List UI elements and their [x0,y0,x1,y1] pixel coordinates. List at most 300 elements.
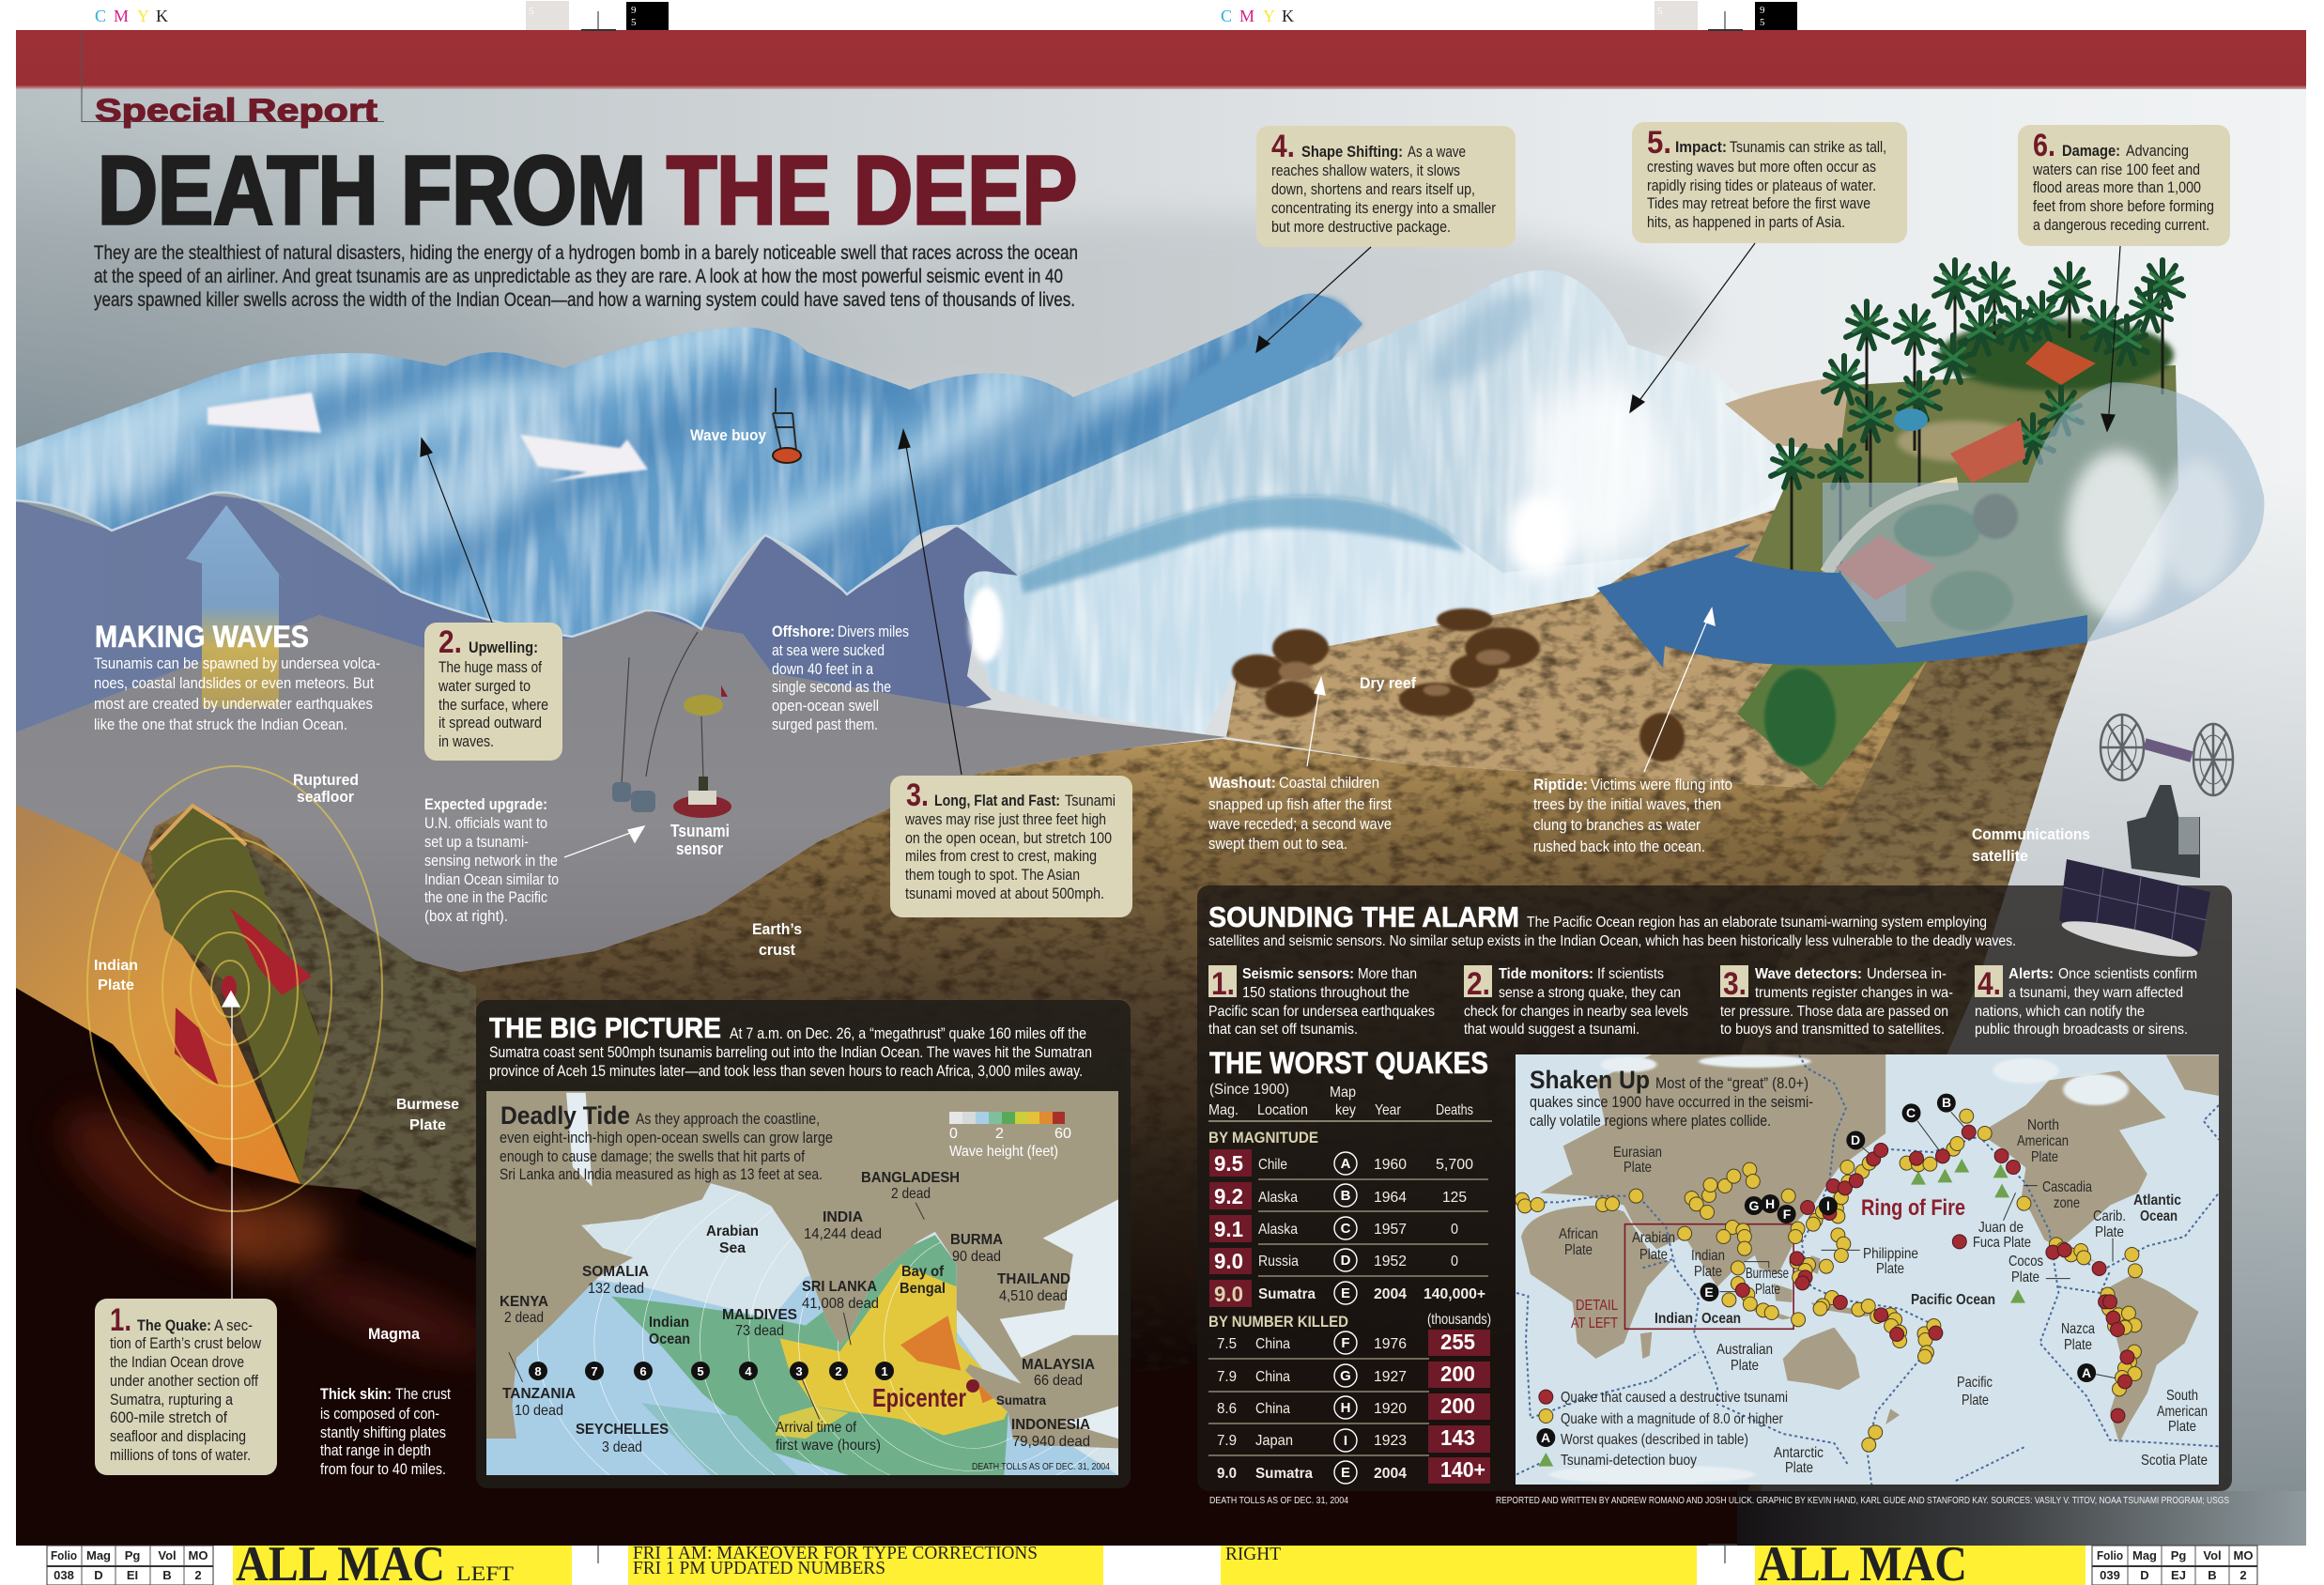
Special Report heading: Special Report [95,93,377,129]
folio table right: D [2140,1568,2149,1582]
callout 4: shape shifting: concentrating its energy into a smaller [1271,199,1496,217]
offshore note: Divers miles [838,623,909,640]
thick skin note: Thick skin: [320,1386,392,1403]
table: the worst quakes: A [1341,1156,1351,1172]
shaken up heading [1530,1066,1813,1130]
expected upgrade note: U.N. officials want to [424,814,547,832]
table: the worst quakes: 9.5 [1214,1151,1243,1176]
offshore note: single second as the [772,678,891,696]
table: the worst quakes: E [1341,1465,1350,1481]
callout 3: long, flat and fast: Long, Flat and Fast: [934,792,1060,809]
expected upgrade note [424,795,559,925]
offshore note: at sea were sucked [772,641,885,659]
blue second wave crest [1164,297,1362,441]
country death tolls: Ocean [649,1331,690,1347]
intro paragraph [94,242,1078,311]
folio table left: 2 [194,1568,202,1582]
quake shock rings [87,766,382,1211]
callout 6: damage: waters can rise 100 feet and [2032,161,2200,178]
folio table left: Folio [51,1548,77,1562]
tectonic plate labels: Eurasian [1613,1145,1662,1161]
table: the worst quakes: 9.2 [1214,1184,1243,1208]
CMYK marks left: M [114,7,129,25]
item: wave detectors [1720,965,1953,1038]
crop marks and registration [526,1,1797,1563]
callout 4: shape shifting: 4. [1271,129,1295,164]
item: alerts: a tsunami, they warn affected [2008,985,2183,1001]
callout 3: long, flat and fast: tsunami moved at about 500mph. [905,885,1104,902]
country death tolls: MALDIVES [722,1307,797,1323]
item: wave detectors: to buoys and transmitted to satellites. [1720,1022,1945,1038]
world map: shaken up: B [1942,1095,1951,1110]
shaken up heading: Most of the “great” (8.0+) [1655,1074,1808,1092]
tectonic plate labels: Carib. [2093,1208,2126,1224]
item: alerts: Once scientists confirm [2058,966,2197,982]
callout 6: damage: Damage: [2062,142,2120,160]
table: the worst quakes: 1957 [1374,1222,1407,1238]
washout note: Coastal children [1279,774,1379,792]
map: deadly tide [486,1091,1118,1475]
crop marks and registration: 5 [1657,6,1663,17]
tectonic plate labels: Plate [1731,1358,1759,1374]
intro paragraph: at the speed of an airliner. And great tsunamis are as unpredictable as they are rare. A look at how the most powerful seismic event in 40 [94,266,1063,287]
wave buoy label: Wave buoy [690,426,766,444]
folio table right: Mag [2132,1548,2157,1562]
deadly tide heading: Sri Lanka and India measured as high as 13 feet at sea. [500,1166,823,1183]
country death tolls: 3 dead [602,1439,642,1455]
CMYK marks right: M [1239,7,1254,25]
country death tolls: BANGLADESH [861,1170,960,1186]
offshore note: Offshore: [772,623,835,640]
callout 6: damage: flood areas more than 1,000 [2033,178,2201,196]
riptide note [1533,776,1732,855]
tectonic plate labels: Plate [1876,1261,1904,1277]
item: wave detectors: 3. [1723,966,1747,1002]
yellow slug: all mac left: LEFT [456,1562,515,1585]
item: alerts: nations, which can notify the [1975,1004,2145,1020]
satellite drum [2059,859,2210,963]
callout 6: damage [2018,125,2230,246]
tectonic plate labels: Ocean [1701,1311,1741,1327]
tectonic plate labels: American [2157,1404,2208,1420]
callout 5: impact: cresting waves but more often occur as [1647,158,1876,176]
table: the worst quakes: Sumatra [1255,1466,1313,1482]
tectonic plate labels: South [2166,1388,2198,1404]
receding water disc [1823,382,2264,657]
burmese plate label [396,1097,459,1133]
table: the worst quakes: 8.6 [1217,1401,1237,1417]
country death tolls: Arabian [706,1223,759,1239]
folio table left: Mag [86,1548,111,1562]
tectonic plate labels: Juan de [1978,1220,2024,1236]
country death tolls: 10 dead [515,1403,563,1419]
item: wave detectors: truments register changes in wa- [1755,985,1953,1001]
tectonic plate labels [1559,1117,2208,1476]
callout 2: upwelling: Upwelling: [469,639,538,656]
yellow slug: all mac right [1755,1537,2085,1585]
trees and village [1764,260,2183,766]
table: the worst quakes: 1952 [1374,1254,1407,1270]
world map: shaken up: I [1826,1198,1830,1213]
callout 1: the quake: Sumatra, rupturing a [110,1392,234,1408]
callout 5: impact: rapidly rising tides or plateaus of water. [1647,177,1876,194]
callout 2: upwelling: 2. [439,624,462,660]
folio table right: EJ [2171,1568,2186,1582]
expected upgrade note: sensing network in the [424,852,558,869]
tectonic plate labels: Australian [1716,1342,1773,1358]
table: the worst quakes: Map [1330,1085,1356,1100]
shaken up heading: quakes since 1900 have occurred in the seismi- [1530,1093,1813,1111]
making waves text block: MAKING WAVES [95,620,309,654]
country death tolls: THAILAND [997,1271,1070,1287]
callout 4: shape shifting: As a wave [1408,143,1466,161]
tectonic plate labels: Antarctic [1774,1445,1824,1461]
item: seismic sensors: that can set off tsunamis. [1208,1022,1358,1038]
callout 2: upwelling: the surface, where [439,696,548,714]
breaking tsunami wave [958,270,1784,662]
table: the worst quakes: Mag. [1208,1102,1239,1118]
country death tolls: 73 dead [735,1323,784,1339]
offshore note [772,623,909,733]
dry reef rocks [1232,608,1685,762]
tectonic plate labels: Ocean [2140,1208,2178,1224]
callout 2: upwelling: The huge mass of [439,658,542,676]
making waves text block: like the one that struck the Indian Ocean. [94,716,347,733]
folio table right: 2 [2239,1568,2247,1582]
intro paragraph: They are the stealthiest of natural disasters, hiding the energy of a hydrogen bomb in a barely noticeable swell that races across the ocean [94,242,1078,264]
country death tolls: Indian [649,1315,689,1331]
country death tolls: Bay of [901,1264,945,1280]
Indian plate wedge [16,805,300,1184]
big picture heading: At 7 a.m. on Dec. 26, a “megathrust” quake 160 miles off the [730,1025,1086,1042]
callout 4: shape shifting [1256,126,1516,247]
tectonic plate labels: Atlantic [2133,1193,2181,1208]
world map legend: Worst quakes (described in table) [1561,1432,1748,1448]
magma label: Magma [368,1325,421,1343]
country death tolls: 2 dead [891,1186,931,1202]
callout 2: upwelling: in waves. [439,732,494,750]
callout 1: the quake: the Indian Ocean drove [110,1354,244,1371]
callout 1: the quake: A sec- [214,1317,253,1334]
table: the worst quakes: 140+ [1440,1457,1485,1482]
water cross-section body [16,495,1019,732]
item: seismic sensors: More than [1358,966,1417,982]
tectonic plate labels: Plate [1785,1460,1813,1476]
epicenter marker: Epicenter [872,1383,966,1412]
riptide note: Riptide: [1533,776,1588,793]
wave height legend: Wave height (feet) [949,1144,1058,1160]
table: the worst quakes: 5,700 [1436,1157,1473,1173]
white direction arrows on the waves [208,392,648,482]
arrival time hour markers: 5 [697,1364,704,1378]
item: tide monitors: sense a strong quake, they can [1499,985,1681,1001]
indian plate label: Plate [98,977,134,993]
washout note: snapped up fish after the first [1208,795,1392,813]
wave buoy [773,388,801,463]
big picture heading: province of Aceh 15 minutes later—and took less than seven hours to reach Africa, 3,000 miles away. [489,1063,1083,1080]
tectonic plate labels: Indian [1655,1311,1693,1327]
olive fault wedge [150,806,321,1184]
world map legend: Tsunami-detection buoy [1561,1453,1697,1469]
item: alerts: Alerts: [2008,966,2054,982]
earth crust cross-section [16,642,2087,1546]
alarm heading: satellites and seismic sensors. No similar setup exists in the Indian Ocean, which has been historically less vulnerable to the deadly waves. [1208,933,2016,949]
ruptured seafloor label [293,771,359,806]
country death tolls: 14,244 dead [804,1226,882,1242]
world map: shaken up: A [1541,1430,1550,1445]
panel: the big picture [476,1000,1408,1584]
item: seismic sensors: Pacific scan for undersea earthquakes [1208,1004,1435,1020]
table: the worst quakes: 255 [1440,1330,1475,1354]
callout 4: shape shifting: but more destructive package. [1271,218,1451,236]
callout 3: long, flat and fast: waves may rise just three feet high [904,810,1106,828]
table: the worst quakes: 0 [1451,1222,1458,1238]
world map: shaken up: A [2082,1365,2091,1380]
title: THE DEEP [667,136,1077,244]
CMYK marks left: Y [137,7,149,25]
callout 4: shape shifting: reaches shallow waters, it slows [1271,162,1460,179]
earth's crust label [752,920,802,959]
table: the worst quakes: China [1255,1336,1290,1352]
coastal land [1734,365,2178,657]
callout 6: damage: Advancing [2126,142,2189,160]
arrival time hour markers: 6 [639,1364,647,1378]
item: tide monitors: 2. [1467,966,1490,1002]
callout 2: upwelling: it spread outward [439,714,542,731]
crop marks and registration: 9 [1760,5,1765,16]
plate motion red arrows [175,908,312,1085]
table: the worst quakes: THE WORST QUAKES [1209,1046,1488,1080]
offshore note: down 40 feet in a [772,660,873,678]
table: the worst quakes: 125 [1442,1190,1467,1206]
table: the worst quakes: 2004 [1374,1466,1407,1482]
callout 3: long, flat and fast: on the open ocean, but stretch 100 [905,829,1112,847]
washout note: Washout: [1208,774,1276,792]
table: the worst quakes: 200 [1440,1393,1475,1418]
table: the worst quakes: (Since 1900) [1209,1082,1289,1098]
arrival time hour markers: 1 [881,1364,888,1378]
table: the worst quakes: 9.1 [1214,1217,1243,1241]
table: the worst quakes: 7.5 [1217,1336,1237,1352]
big picture heading [489,1011,1092,1080]
callout 1: the quake: The Quake: [137,1317,211,1334]
table: the worst quakes: I [1344,1433,1347,1449]
tectonic plate labels: Plate [1624,1160,1652,1176]
table: the worst quakes: Location [1257,1102,1308,1118]
yellow slug: corrections note [628,1543,1103,1585]
making waves text block: most are created by underwater earthquakes [94,695,373,713]
tectonic plate labels: Plate [2095,1224,2124,1240]
callout 1: the quake: seafloor and displacing [110,1428,246,1445]
crop marks and registration: 9 [631,5,637,16]
tectonic plate labels: Plate [1564,1242,1593,1258]
expected upgrade note: set up a tsunami- [424,833,529,851]
folio table right: B [2208,1568,2217,1582]
world map: shaken up: F [1783,1207,1792,1222]
tectonic plate labels: Philippine [1863,1246,1918,1262]
table: the worst quakes: C [1341,1221,1351,1237]
washout note: wave receded; a second wave [1208,815,1392,833]
folio table left: MO [189,1548,208,1562]
title [98,136,1077,244]
tectonic plate labels: Arabian [1632,1230,1675,1246]
country death tolls: 66 dead [1034,1373,1083,1389]
panel: sounding the alarm [1197,859,2232,1506]
epicenter dot [222,976,237,1000]
table: the worst quakes: 1960 [1374,1157,1407,1173]
table: the worst quakes: 1923 [1374,1433,1407,1449]
alarm heading: SOUNDING THE ALARM [1208,900,1519,933]
table: the worst quakes: Year [1375,1102,1402,1118]
callout 5: impact: Tsunamis can strike as tall, [1730,138,1886,156]
deadly tide heading: even eight-inch-high open-ocean swells can grow large [500,1130,833,1146]
folio table left: Vol [158,1548,177,1562]
indian plate label: Indian [94,958,138,974]
ruptured seafloor label: Ruptured [293,771,359,789]
tectonic plate labels: zone [2054,1195,2080,1211]
table: the worst quakes: 1964 [1374,1190,1407,1206]
folio table left: EI [127,1568,138,1582]
back beach [1725,376,1850,451]
callout 4: shape shifting: Shape Shifting: [1301,143,1403,161]
callout 5: impact [1632,122,1907,243]
world map legend [1561,1390,1788,1469]
folio table right: Vol [2203,1548,2222,1562]
offshore note: open-ocean swell [772,697,879,715]
country death tolls: Sumatra [996,1393,1046,1408]
crop marks and registration: 5 [631,17,637,28]
tectonic plate labels: Plate [2031,1149,2058,1165]
callout 3: long, flat and fast: them tough to spot. The Asian [905,866,1080,884]
folio table left: D [94,1568,103,1582]
washout note [1208,774,1392,853]
callout 6: damage: a dangerous receding current. [2033,216,2209,234]
CMYK marks right: K [1282,7,1294,25]
callout 5: impact: 5. [1647,125,1671,161]
table: the worst quakes: F [1341,1335,1350,1351]
alarm heading [1208,900,2016,949]
country death tolls: BURMA [950,1232,1003,1248]
table: the worst quakes: Alaska [1258,1222,1298,1238]
folio table left [47,1546,213,1585]
tsunami sensor label [670,822,730,858]
grass slope [1737,648,1928,789]
thick skin note: The crust [395,1386,451,1403]
callout 3: long, flat and fast: 3. [906,777,929,813]
earth's crust label: Earth’s [752,920,802,938]
right cliff face [1596,642,2087,1546]
ring of fire label: Ring of Fire [1861,1195,1965,1221]
world map legend: Quake that caused a destructive tsunami [1561,1390,1788,1406]
table: the worst quakes: Japan [1255,1433,1293,1449]
thick skin note [320,1386,451,1478]
wave height legend: 0 [949,1126,958,1142]
tectonic plate labels: North [2027,1117,2059,1133]
thick skin note: is composed of con- [320,1406,439,1423]
item: wave detectors: Wave detectors: [1755,966,1862,982]
item: tide monitors: Tide monitors: [1499,966,1593,982]
arrival time hour markers: 4 [745,1364,752,1378]
yellow slug: right: RIGHT [1225,1544,1281,1564]
making waves text block [94,620,380,733]
table: the worst quakes: 9.0 [1214,1282,1243,1306]
wave height legend: 60 [1054,1126,1071,1142]
seafloor [16,608,1226,972]
title: DEATH FROM [98,136,646,244]
thick skin note: that range in depth [320,1442,431,1459]
wave height legend [949,1112,1071,1160]
earth's crust label: crust [759,941,795,959]
table: the worst quakes: Deaths [1436,1102,1473,1118]
table: the worst quakes: 9.0 [1217,1466,1237,1482]
tectonic plate labels: American [2017,1133,2069,1149]
world map: shaken up: G [1749,1198,1760,1213]
red masthead band [16,30,2306,89]
arrival time hour markers: 8 [534,1364,542,1378]
crop marks and registration: 5 [529,6,534,17]
offshore note: surged past them. [772,716,878,733]
item: wave detectors: Undersea in- [1867,966,1947,982]
thick skin note: from four to 40 miles. [320,1461,446,1478]
callout 1: the quake: tion of Earth’s crust below [110,1335,261,1352]
table: the worst quakes: 7.9 [1217,1433,1237,1449]
wave surface [16,293,1362,637]
country death tolls [500,1170,1110,1472]
callout 1: the quake: 600-mile stretch of [110,1409,227,1426]
expected upgrade note: Expected upgrade: [424,795,547,813]
tsunami sensor label: Tsunami [670,822,730,840]
table: the worst quakes: B [1341,1188,1351,1204]
item: alerts [1975,965,2197,1038]
folio table left: Pg [125,1548,140,1562]
table: the worst quakes: D [1341,1253,1351,1269]
swirl foam [2066,451,2235,620]
yellow slug: corrections note: FRI 1 PM UPDATED NUMBERS [633,1558,885,1578]
tsunami sensor label: sensor [676,839,723,858]
communications satellite label: satellite [1972,847,2028,865]
folio table right: MO [2234,1548,2253,1562]
country death tolls: TANZANIA [502,1386,576,1402]
country death tolls: SEYCHELLES [576,1422,669,1438]
item: tide monitors: check for changes in nearby sea levels [1464,1004,1688,1020]
item: alerts: public through broadcasts or sirens. [1975,1022,2188,1038]
big picture heading: THE BIG PICTURE [489,1011,721,1044]
table: the worst quakes: Alaska [1258,1190,1298,1206]
table: the worst quakes [1208,1046,1492,1484]
shaken up heading: cally volatile regions where plates collide. [1530,1112,1771,1130]
deadly tide heading [500,1101,833,1183]
world map: shaken up: E [1704,1285,1714,1300]
country death tolls: Sea [719,1240,746,1256]
world map: shaken up: C [1906,1105,1916,1120]
item: tide monitors [1464,965,1688,1038]
table source note: DEATH TOLLS AS OF DEC. 31, 2004 [1209,1495,1348,1506]
CMYK marks left [95,7,168,25]
deadly tide heading: As they approach the coastline, [636,1111,820,1128]
world map legend: Quake with a magnitude of 8.0 or higher [1561,1411,1784,1427]
folio table right: Folio [2097,1548,2123,1562]
table: the worst quakes: 1976 [1374,1336,1407,1352]
riptide note: trees by the initial waves, then [1533,795,1721,813]
burmese plate label: Plate [409,1117,446,1133]
callout 6: damage: 6. [2033,128,2055,163]
sand beach [1226,507,1822,789]
item: seismic sensors: 1. [1211,966,1235,1002]
callout 1: the quake: under another section off [110,1373,258,1390]
expected upgrade note: the one in the Pacific [424,888,547,906]
table: the worst quakes: 143 [1440,1425,1475,1450]
table: the worst quakes: G [1340,1368,1351,1384]
